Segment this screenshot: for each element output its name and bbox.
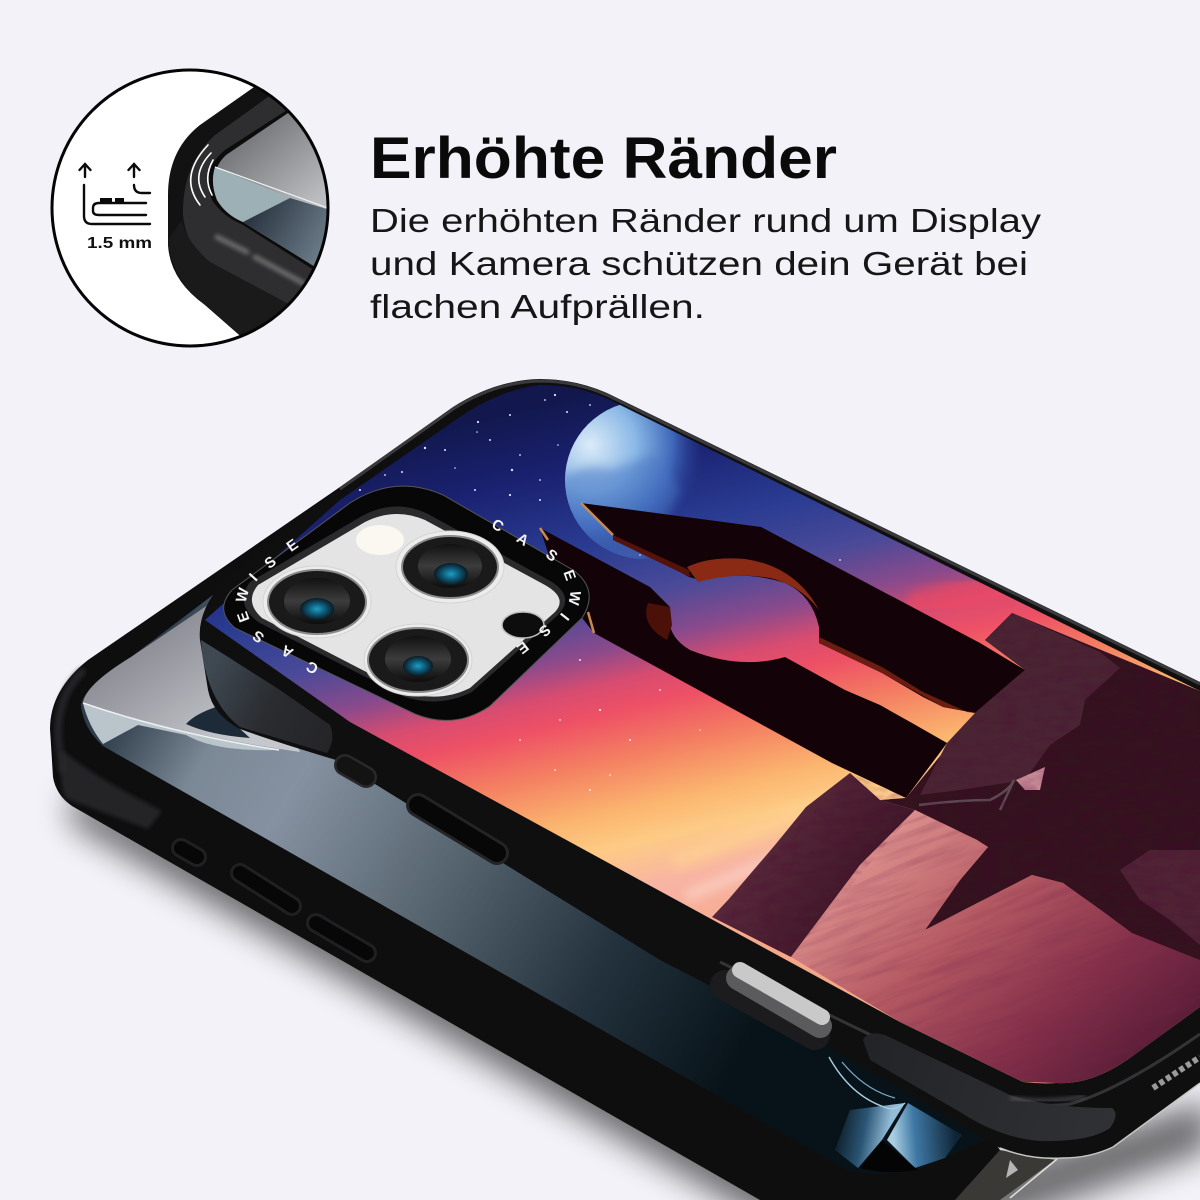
lake water: [791, 810, 1200, 1083]
back phone screen: [81, 495, 1000, 1174]
description text: Die erhöhten Ränder rund um Display: [370, 202, 1042, 239]
brand ring: CASEWISE: W: [564, 589, 584, 607]
glow wallpaper at screen bottom: [829, 1057, 962, 1172]
brand ring: CASEWISE: I: [556, 610, 572, 623]
phone back artwork: [205, 385, 1200, 1084]
carbon corner patch: near camera: [201, 640, 332, 753]
lens: left: [263, 566, 371, 638]
sky gradient: [190, 360, 1200, 1100]
ridged edge highlight: [1153, 1057, 1200, 1088]
description text: [370, 202, 1042, 325]
brand ring: CASEWISE: C: [303, 657, 321, 677]
drop shadows beneath phones: [70, 790, 1200, 1200]
glossy rim line: [720, 962, 1200, 1105]
brand ring: CASEWISE: S: [261, 553, 280, 572]
brand ring: CASEWISE: E: [284, 536, 301, 556]
brand ring: CASEWISE: [233, 516, 584, 677]
description text: flachen Aufprällen.: [370, 288, 705, 325]
mountains: left rock: [712, 773, 915, 957]
brand ring: CASEWISE: E: [513, 638, 532, 657]
lower tower: [540, 528, 947, 798]
screen upper glare: [83, 590, 300, 752]
brand ring: CASEWISE: S: [535, 621, 554, 640]
brand ring: CASEWISE: I: [246, 570, 261, 585]
description text: und Kamera schützen dein Gerät bei: [370, 245, 1028, 282]
label: 1.5 mm: 1.5 mm: [87, 235, 152, 252]
inset circle: raised edge detail: [52, 70, 340, 346]
brand ring: CASEWISE: C: [488, 516, 507, 536]
island inner wall: [244, 506, 565, 701]
stars: [359, 394, 841, 791]
lens: upper right: [396, 531, 504, 603]
lens: lower: [364, 624, 472, 696]
icon: raised edge diagram: [80, 164, 150, 224]
carbon corner patch: lower right: [863, 1033, 1116, 1141]
gloss highlight on corner: [1010, 1096, 1085, 1101]
heading block: [370, 126, 1042, 325]
tower gold edges: [581, 503, 613, 535]
title: Erhöhte Ränder: [370, 126, 837, 191]
brand ring: CASEWISE: S: [250, 626, 267, 646]
tower red arc: [687, 558, 819, 610]
side buttons: front phone: [345, 765, 497, 853]
moon cloud shading: [565, 456, 680, 559]
carbon corner patch: [61, 750, 162, 829]
upper tower: [581, 503, 1025, 713]
brand ring: CASEWISE: A: [278, 641, 296, 661]
pale glass reflection: [83, 703, 279, 750]
island ring: [224, 486, 589, 720]
front phone: black case: [200, 379, 1200, 1158]
monolith towers: [540, 503, 1025, 798]
brand ring: CASEWISE: S: [542, 546, 561, 565]
rock trail: [919, 780, 1014, 810]
side buttons: back phone: [181, 848, 367, 953]
silver side button: [725, 970, 822, 1035]
brand ring: CASEWISE: E: [234, 609, 254, 624]
mountains: right rock mass: [880, 613, 1200, 960]
sunset streaks: [680, 585, 1000, 895]
translucent case edge behind corner: [955, 1150, 1057, 1200]
dark reflection blob: [186, 707, 250, 738]
camera island: [224, 486, 589, 720]
case frame highlight: [58, 672, 82, 770]
upper rim: [340, 381, 1200, 684]
camera plate: [252, 514, 560, 697]
mountains: lighter ridges: [920, 613, 1120, 795]
microphone hole: [502, 612, 544, 638]
impact arcs: [191, 145, 213, 205]
back phone: black case: [50, 487, 1000, 1200]
moon: [565, 404, 698, 540]
case corner close-up: [168, 87, 326, 336]
brand ring: CASEWISE: A: [513, 530, 532, 550]
brand ring: CASEWISE: W: [233, 585, 253, 604]
flash: [356, 525, 404, 555]
rock texture: [734, 688, 1152, 953]
brand ring: CASEWISE: E: [559, 568, 579, 583]
water ripples: [798, 815, 1073, 1026]
